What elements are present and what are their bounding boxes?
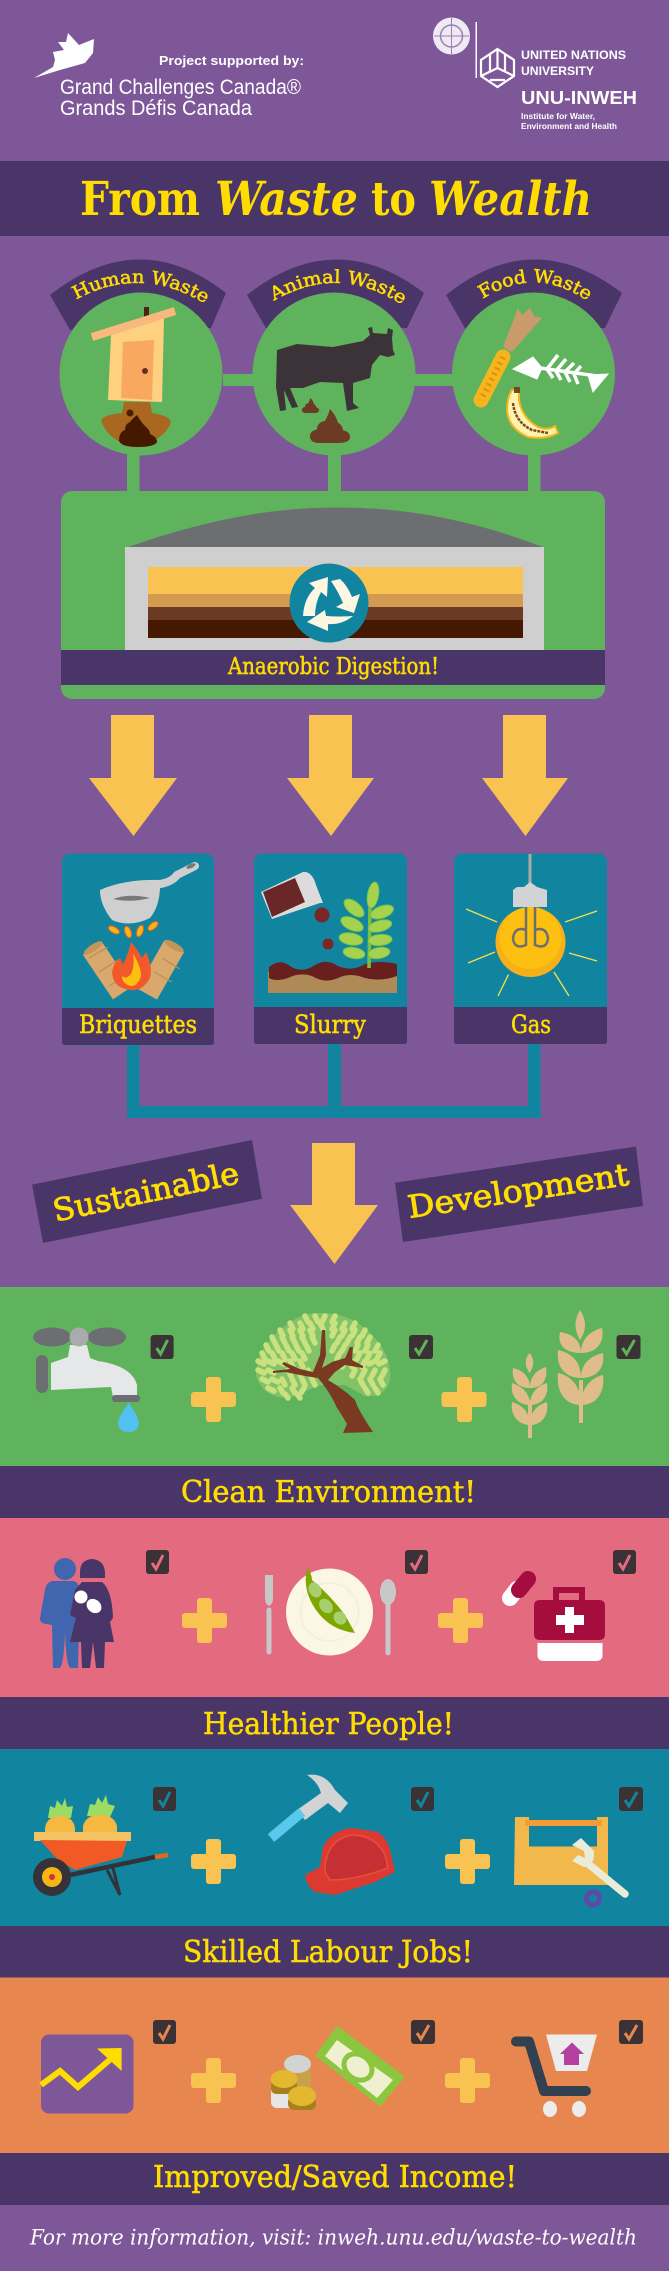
band: clean environment: Clean Environment! [181,1475,476,1510]
band: healthier people: Healthier People! [203,1707,454,1742]
arrow: to gas [482,715,568,836]
checkbox [153,2020,176,2044]
panel: gas [454,854,607,1044]
icon: recycle [290,564,368,642]
plus [191,2058,236,2103]
icon: toolbox and wrench [514,1817,625,1905]
icon: family [40,1558,114,1668]
label: development: Development [405,1157,632,1226]
icon: soil [268,962,397,993]
UNU wordmark: UNITED NATIONS [521,48,626,62]
checkbox [409,1335,433,1359]
icon: corn [481,308,542,400]
checkbox [619,1787,643,1811]
icon: small flames [107,920,160,939]
checkbox [613,1550,636,1574]
plus [442,1377,486,1422]
plus [445,1839,490,1884]
title: to [371,172,416,227]
panel: slurry [254,854,407,1044]
logo: United Nations University [433,18,637,131]
icon: wheat [512,1310,603,1438]
label: human waste: Human Waste [70,270,208,302]
label: sustainable [32,1140,262,1243]
icon: UN emblem [433,18,470,54]
organisation name english: Grand Challenges Canada® [60,76,301,99]
panel: improved saved income [0,1978,669,2154]
icon: light bulb [466,854,597,996]
panel: human waste [60,270,222,456]
digester roof [127,507,544,548]
checkbox [619,2020,643,2044]
panel: anaerobic digester [61,491,605,699]
checkbox [411,2020,435,2044]
plus [445,2058,490,2103]
icon: water tap [33,1328,140,1432]
banner: waste labels [50,259,622,330]
icon: leaf bird [34,33,94,78]
plus [182,1598,227,1643]
panel: briquettes [62,854,214,1046]
icon: small dung [302,398,319,413]
band: clean environment [0,1466,669,1518]
panel: healthier people [0,1518,669,1697]
icon: briquette logs and fire [82,937,185,994]
icon: wheelbarrow [33,1795,168,1896]
icon: plate of beans [265,1568,396,1656]
logo: Grand Challenges Canada [34,33,304,120]
icon: hammer [271,1775,348,1838]
checkbox [411,1787,434,1811]
title [80,172,592,227]
organisation name french: Grands Défis Canada [60,97,252,120]
band: healthier people [0,1697,669,1749]
plus [191,1377,236,1422]
icon: pouring jar [261,872,334,950]
icon: banknote [315,2026,405,2106]
checkbox [151,1335,174,1359]
panel: skilled labour jobs [0,1749,669,1926]
icon: plant [338,881,395,968]
icon: banana peel [507,387,558,438]
icon: cow [276,327,395,411]
icon: rising chart [41,2034,134,2114]
label: slurry: Slurry [294,1010,367,1039]
logo: United Nations University: Environment and Health [521,122,617,131]
plus [191,1839,236,1884]
title: From [80,172,200,227]
label: development [395,1146,643,1242]
project supported label: Project supported by: [159,53,304,68]
checkbox [405,1550,428,1574]
arrow: to briquettes [89,715,177,836]
icon: tree [256,1313,390,1433]
label: anaerobic digestion: Anaerobic Digestion! [227,654,439,680]
connectors: waste to digester [127,374,540,495]
icon: large dung [310,409,350,443]
checkbox [153,1787,176,1811]
band: improved saved income: Improved/Saved Income! [153,2160,517,2195]
title band [0,161,669,236]
panel: clean environment [0,1287,669,1466]
plus [438,1598,483,1643]
label: animal waste: Animal Waste [273,269,405,303]
footer text: For more information, visit: inweh.unu.edu/waste-to-wealth [29,2226,637,2250]
band: skilled labour jobs [0,1926,669,1978]
label: food waste: Food Waste [476,268,590,299]
band: improved saved income [0,2153,669,2205]
icon: UNU hexagon [481,49,514,87]
connectors: outputs to development [127,1040,540,1118]
label: sustainable: Sustainable [50,1156,242,1229]
icon: coins [270,2055,316,2110]
panel: food waste [452,268,615,456]
logo: United Nations University: Institute for Water, [521,112,595,121]
checkbox [146,1550,169,1574]
digester layers [148,567,523,638]
band: skilled labour jobs: Skilled Labour Jobs! [183,1935,473,1970]
icon: latrine [92,307,175,447]
checkbox [616,1335,640,1359]
icon: pan [100,862,196,924]
logo: United Nations University: UNIVERSITY [521,64,594,78]
title: Waste [215,172,358,227]
label: briquettes: Briquettes [79,1010,197,1039]
icon: fish bones [513,355,608,392]
arrow: to outcomes [290,1143,378,1264]
arrow: to slurry [287,715,374,836]
title: Wealth [429,172,592,227]
icon: hard hat [305,1828,395,1895]
logo: United Nations University: UNU-INWEH [521,88,637,108]
label: gas: Gas [511,1010,551,1039]
panel: animal waste [252,269,416,456]
icon: pill and medical kit [510,1579,605,1661]
icon: shopping cart [516,2034,597,2117]
